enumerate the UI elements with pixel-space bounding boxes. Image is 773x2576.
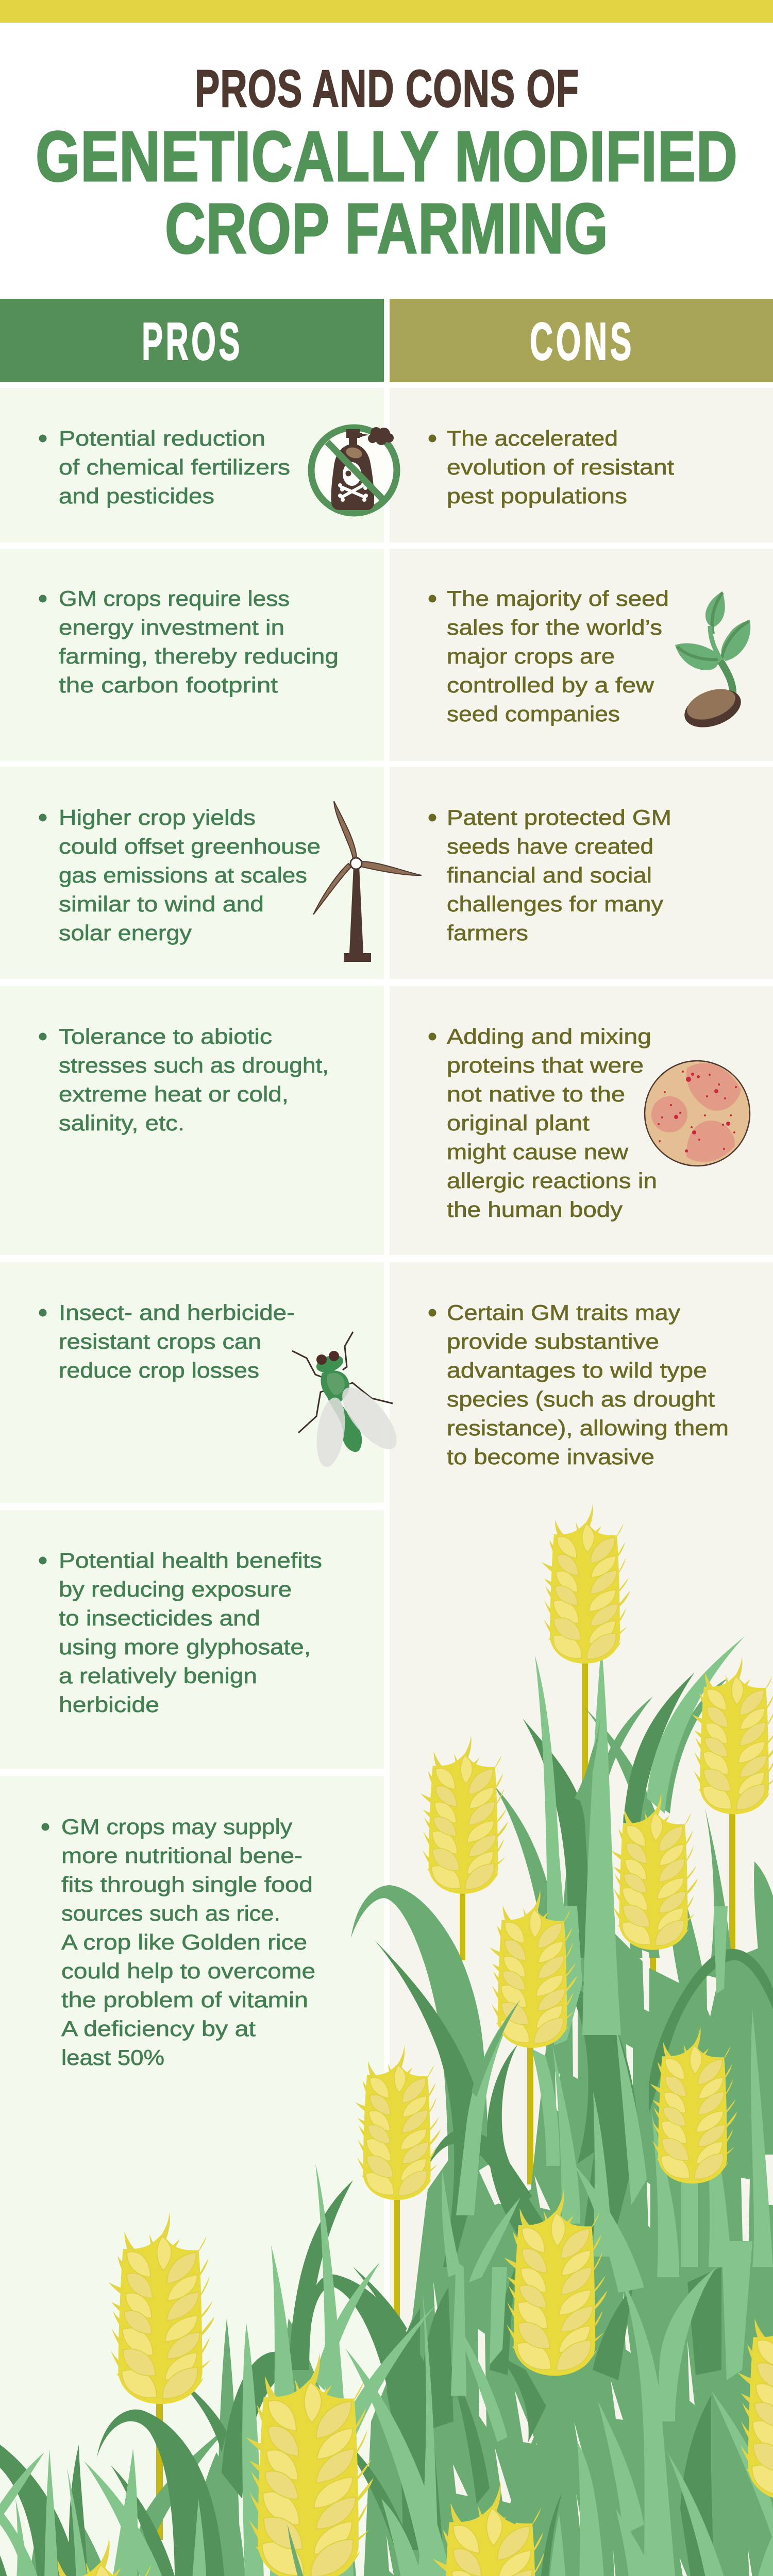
pro 5: insect resistant: reduce crop losses xyxy=(59,1358,259,1382)
icon: sprouting seed xyxy=(675,591,750,735)
pros row backgrounds xyxy=(0,388,384,2576)
pro 4: abiotic tolerance: stresses such as drought, xyxy=(59,1053,329,1077)
con 4: allergic reactions: Adding and mixing xyxy=(447,1024,651,1048)
con 3: patent protected seeds: seeds have created xyxy=(447,834,653,858)
pro 2: energy investment: the carbon footprint xyxy=(59,673,278,697)
pro 7: nutritional benefits: sources such as rice. xyxy=(61,1901,280,1925)
title: PROS AND CONS OF xyxy=(195,59,579,118)
pro 5: insect resistant xyxy=(39,1300,295,1382)
pro 5: insect resistant: Insect- and herbicide- xyxy=(59,1300,295,1325)
pro 7: nutritional benefits: the problem of vitamin xyxy=(61,1988,308,2012)
pro 5: insect resistant: resistant crops can xyxy=(59,1329,261,1353)
con 5: invasive traits: Certain GM traits may xyxy=(447,1300,680,1325)
con 5: invasive traits: species (such as drought xyxy=(447,1387,715,1411)
pro 7: nutritional benefits: could help to overcome xyxy=(61,1959,315,1983)
pro 2: energy investment: farming, thereby reducing xyxy=(59,644,339,668)
pro 6: health benefits: to insecticides and xyxy=(59,1606,260,1630)
pro 2: energy investment: energy investment in xyxy=(59,615,284,639)
pro 3: crop yields: similar to wind and xyxy=(59,892,264,916)
pro 7: nutritional benefits xyxy=(41,1815,315,2070)
con 5: invasive traits xyxy=(429,1300,729,1469)
pro 4: abiotic tolerance: salinity, etc. xyxy=(59,1111,184,1135)
title: CROP FARMING xyxy=(165,189,609,268)
con 3: patent protected seeds: challenges for many xyxy=(447,892,663,916)
con 5: invasive traits: resistance), allowing them xyxy=(447,1416,729,1440)
wheat ears: lower group xyxy=(39,2189,773,2576)
pro 1: chemical reduction: of chemical fertilizers xyxy=(59,455,290,479)
con 4: allergic reactions: allergic reactions in xyxy=(447,1168,657,1193)
con 4: allergic reactions: might cause new xyxy=(447,1140,629,1164)
pro 7: nutritional benefits: A deficiency by at xyxy=(61,2016,256,2041)
pro 3: crop yields: could offset greenhouse xyxy=(59,834,321,858)
icon: fly xyxy=(292,1332,406,1469)
pro 7: nutritional benefits: fits through single food xyxy=(61,1872,313,1896)
grass: dark blades xyxy=(0,1672,773,2576)
pro 3: crop yields: solar energy xyxy=(59,921,192,945)
pros column header xyxy=(0,299,384,382)
con 4: allergic reactions: not native to the xyxy=(447,1082,625,1106)
cons column header: CONS xyxy=(530,312,634,371)
con 1: resistant pests: evolution of resistant xyxy=(447,455,674,479)
con 1: resistant pests: pest populations xyxy=(447,484,627,508)
pro 6: health benefits: Potential health benefits xyxy=(59,1548,322,1572)
pro 2: energy investment xyxy=(39,586,339,697)
pro 3: crop yields: gas emissions at scales xyxy=(59,863,307,887)
icon: skin rash circle xyxy=(645,1061,750,1166)
pro 6: health benefits: by reducing exposure xyxy=(59,1577,292,1601)
con 2: seed companies: seed companies xyxy=(447,702,620,726)
wheat ears: upper group xyxy=(355,1503,773,2200)
title xyxy=(36,59,738,268)
pro 7: nutritional benefits: least 50% xyxy=(61,2045,164,2070)
pros column header: PROS xyxy=(142,312,243,371)
pro 6: health benefits xyxy=(39,1548,322,1717)
pro 3: crop yields: Higher crop yields xyxy=(59,805,256,829)
pro 1: chemical reduction xyxy=(39,426,290,508)
con 4: allergic reactions: original plant xyxy=(447,1111,590,1135)
con 3: patent protected seeds: financial and social xyxy=(447,863,652,887)
grass: foreground blades xyxy=(288,2421,541,2576)
con 2: seed companies: controlled by a few xyxy=(447,673,654,697)
pro 2: energy investment: GM crops require less xyxy=(59,586,290,611)
con 4: allergic reactions: proteins that were xyxy=(447,1053,644,1077)
con 5: invasive traits: advantages to wild type xyxy=(447,1358,707,1382)
cons row backgrounds xyxy=(390,388,773,2576)
grass: blades over upper ears xyxy=(472,1718,600,2097)
con 5: invasive traits: provide substantive xyxy=(447,1329,659,1353)
pro 6: health benefits: a relatively benign xyxy=(59,1664,257,1688)
icon: wind turbine xyxy=(313,801,422,962)
pro 6: health benefits: herbicide xyxy=(59,1692,159,1717)
wheat stems xyxy=(156,1662,735,2540)
con 2: seed companies: major crops are xyxy=(447,644,615,668)
grass: background gaps xyxy=(26,1906,773,2576)
pro 7: nutritional benefits: more nutritional bene- xyxy=(61,1843,303,1868)
pro 3: crop yields xyxy=(39,805,321,945)
pro 4: abiotic tolerance: Tolerance to abiotic xyxy=(59,1024,272,1048)
con 2: seed companies: sales for the world’s xyxy=(447,615,662,639)
pro 1: chemical reduction: and pesticides xyxy=(59,484,214,508)
pro 4: abiotic tolerance xyxy=(39,1024,329,1135)
icon: no pesticide bottle xyxy=(311,427,397,513)
con 3: patent protected seeds: Patent protected GM xyxy=(447,805,671,829)
con 3: patent protected seeds: farmers xyxy=(447,921,528,945)
con 3: patent protected seeds xyxy=(429,805,671,945)
pro 6: health benefits: using more glyphosate, xyxy=(59,1635,311,1659)
con 1: resistant pests xyxy=(429,426,674,508)
cons column header xyxy=(390,299,773,382)
con 4: allergic reactions xyxy=(429,1024,657,1222)
con 1: resistant pests: The accelerated xyxy=(447,426,618,450)
grass: back mass xyxy=(25,1678,773,2576)
pro 1: chemical reduction: Potential reduction xyxy=(59,426,265,450)
grass: light blades xyxy=(0,1636,773,2576)
con 4: allergic reactions: the human body xyxy=(447,1197,623,1222)
pro 7: nutritional benefits: A crop like Golden rice xyxy=(61,1930,307,1954)
pro 4: abiotic tolerance: extreme heat or cold, xyxy=(59,1082,289,1106)
con 2: seed companies: The majority of seed xyxy=(447,586,669,611)
top yellow bar xyxy=(0,0,773,23)
con 5: invasive traits: to become invasive xyxy=(447,1445,654,1469)
pro 7: nutritional benefits: GM crops may supply xyxy=(61,1815,292,1839)
con 2: seed companies xyxy=(429,586,669,726)
